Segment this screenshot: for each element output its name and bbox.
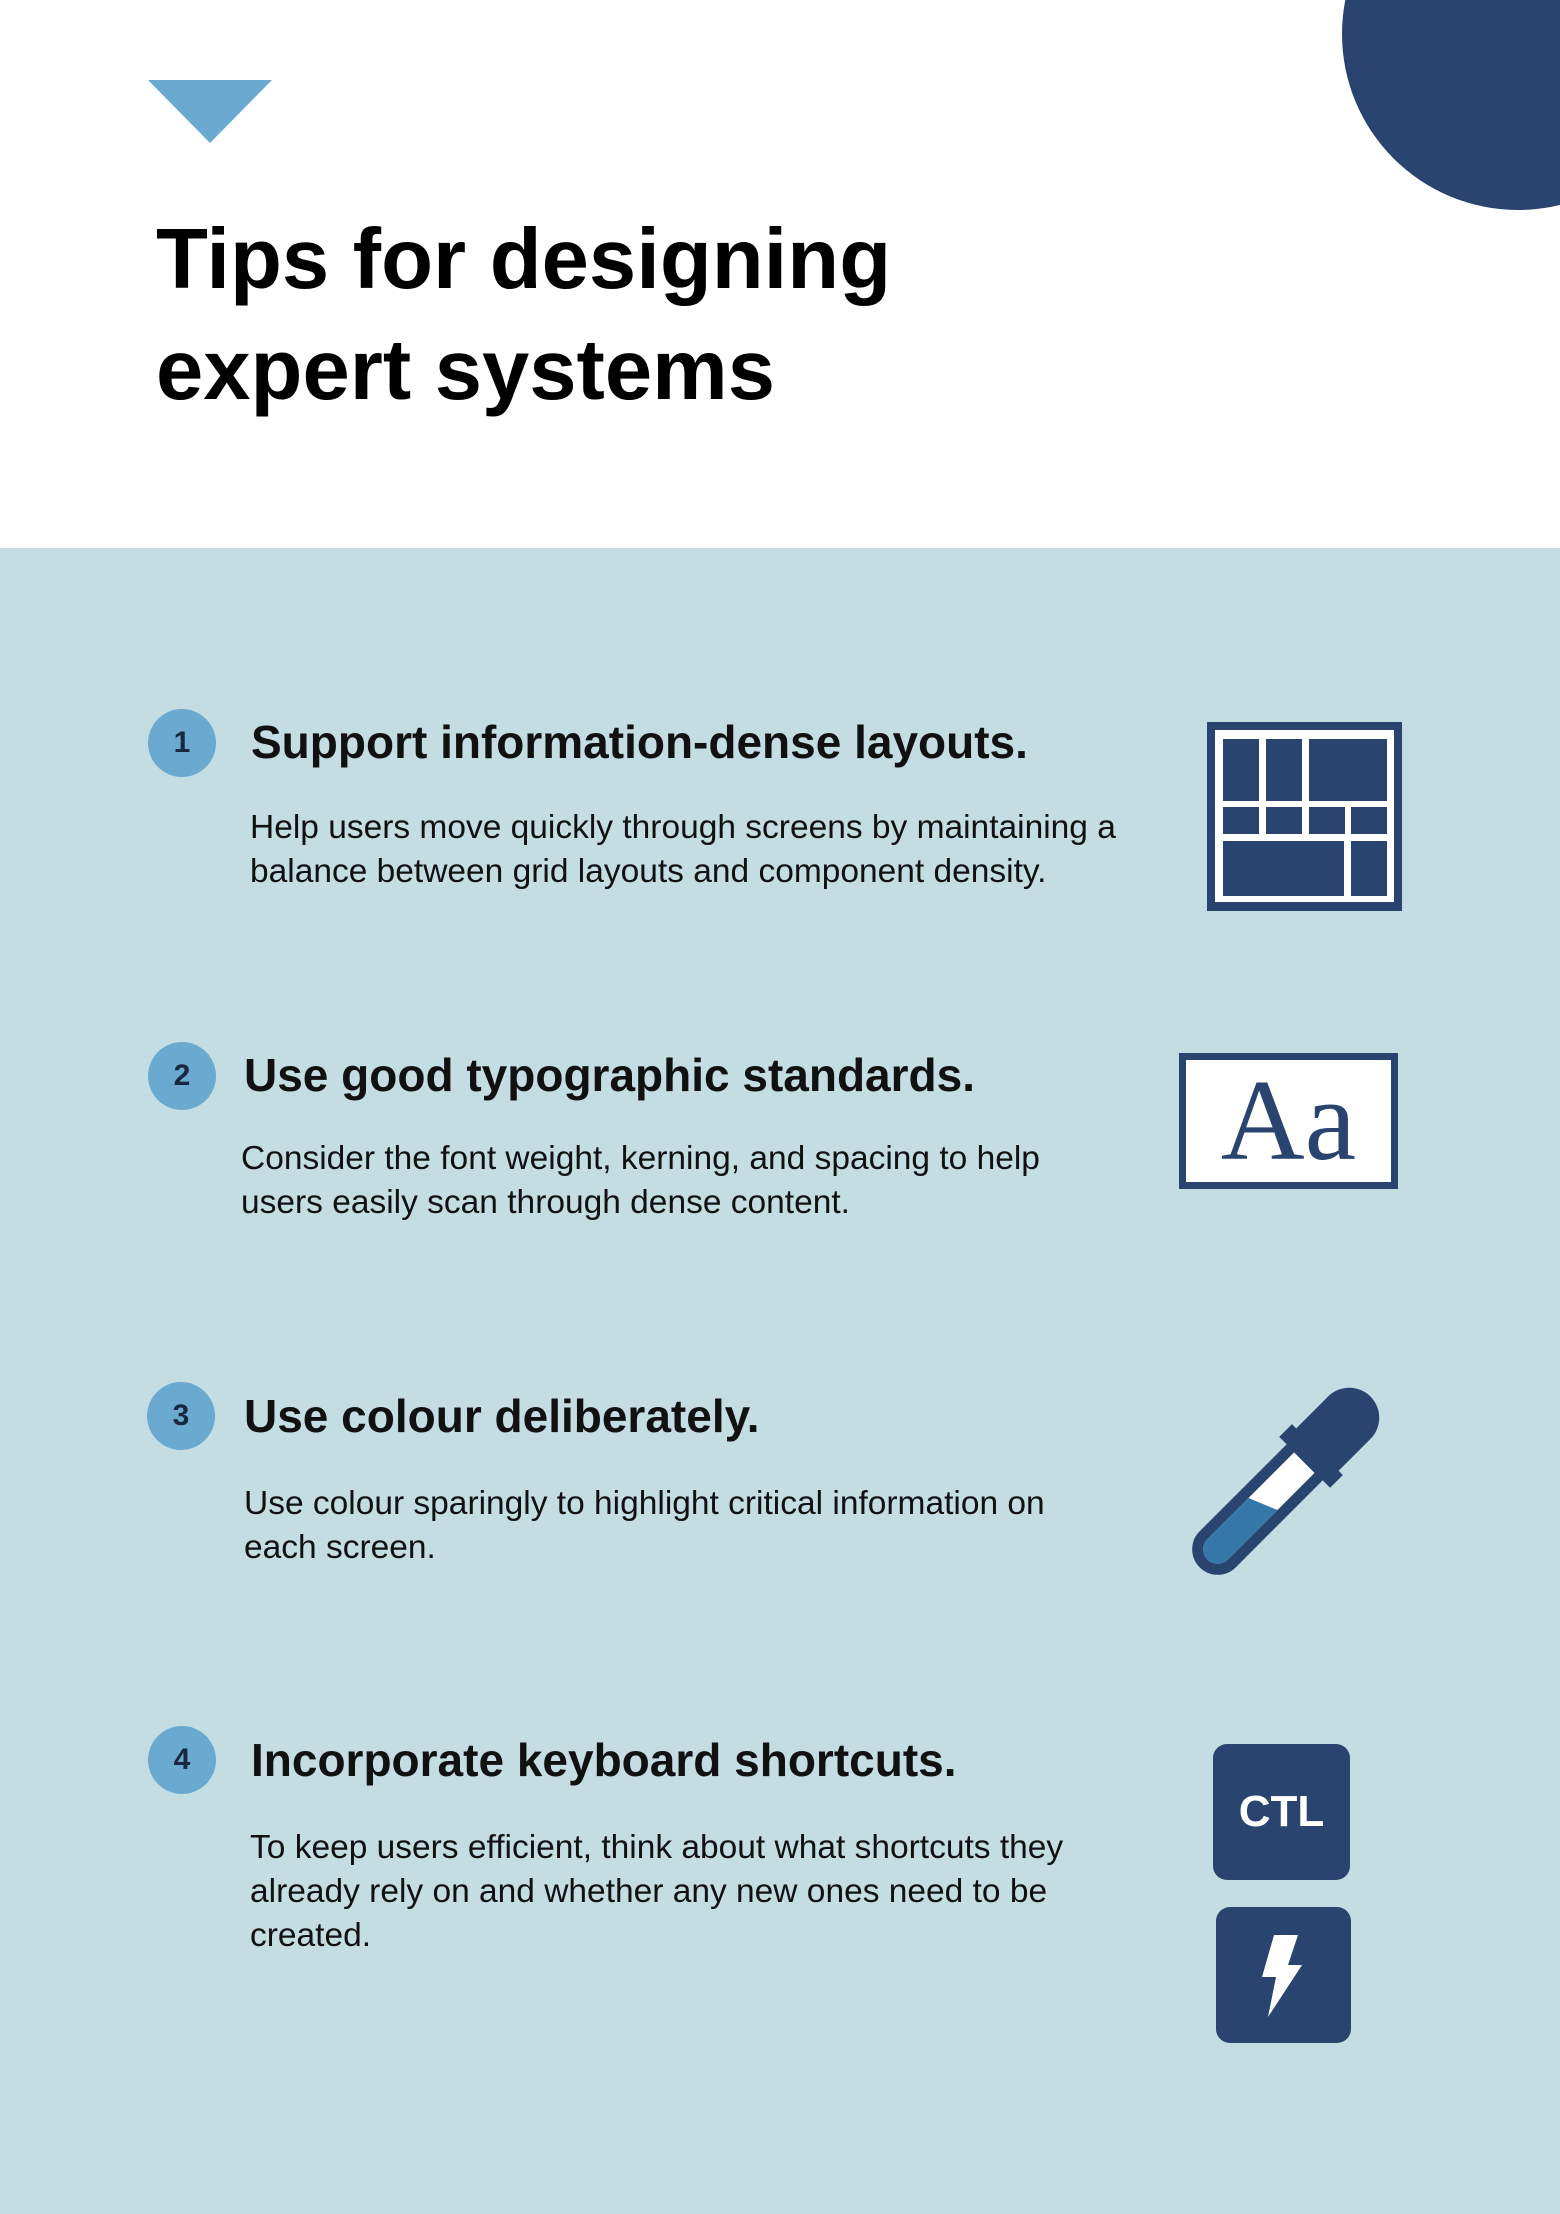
icon: triangle xyxy=(148,80,272,143)
icon: CTL key: CTL xyxy=(1239,1787,1324,1836)
heading 4: Incorporate keyboard shortcuts. xyxy=(251,1734,956,1786)
number 3: 3 xyxy=(173,1399,189,1432)
number 4: 4 xyxy=(174,1743,190,1776)
heading 3: Use colour deliberately. xyxy=(244,1390,760,1442)
number 3 xyxy=(147,1382,215,1450)
icon: dropper xyxy=(1192,1388,1380,1575)
title xyxy=(156,212,891,418)
body 3 xyxy=(244,1485,1045,1566)
body 4: created. xyxy=(250,1917,371,1954)
number 4 xyxy=(148,1726,216,1794)
number 2 xyxy=(148,1042,216,1110)
body 1: balance between grid layouts and component density. xyxy=(250,853,1046,890)
title: expert systems xyxy=(156,323,775,418)
body 3: each screen. xyxy=(244,1529,436,1566)
body 3: Use colour sparingly to highlight critical information on xyxy=(244,1485,1045,1522)
decorative circle top right xyxy=(1342,0,1560,210)
body 4: already rely on and whether any new ones need to be xyxy=(250,1873,1047,1910)
title: Tips for designing xyxy=(156,212,891,307)
body 1: Help users move quickly through screens by maintaining a xyxy=(250,809,1116,846)
tip 3 xyxy=(147,1382,1380,1575)
icon: Aa: Aa xyxy=(1221,1057,1356,1185)
icon: lightning key xyxy=(1216,1907,1351,2043)
icon: CTL key xyxy=(1213,1744,1350,1880)
body 2 xyxy=(241,1140,1040,1221)
heading 2: Use good typographic standards. xyxy=(244,1049,975,1101)
body 2: Consider the font weight, kerning, and spacing to help xyxy=(241,1140,1040,1177)
body 2: users easily scan through dense content. xyxy=(241,1184,850,1221)
heading 1: Support information-dense layouts. xyxy=(251,716,1028,768)
tip 1 xyxy=(148,709,1402,911)
number 1 xyxy=(148,709,216,777)
body 4 xyxy=(250,1829,1063,1954)
body 1 xyxy=(250,809,1116,890)
tip 2 xyxy=(148,1042,1398,1221)
icon: Aa xyxy=(1179,1053,1398,1189)
panel: tips background xyxy=(0,548,1560,2214)
body 4: To keep users efficient, think about what shortcuts they xyxy=(250,1829,1063,1866)
number 1: 1 xyxy=(174,726,190,759)
tip 4 xyxy=(148,1726,1351,2043)
icon: grid layout xyxy=(1207,722,1402,911)
number 2: 2 xyxy=(174,1059,190,1092)
